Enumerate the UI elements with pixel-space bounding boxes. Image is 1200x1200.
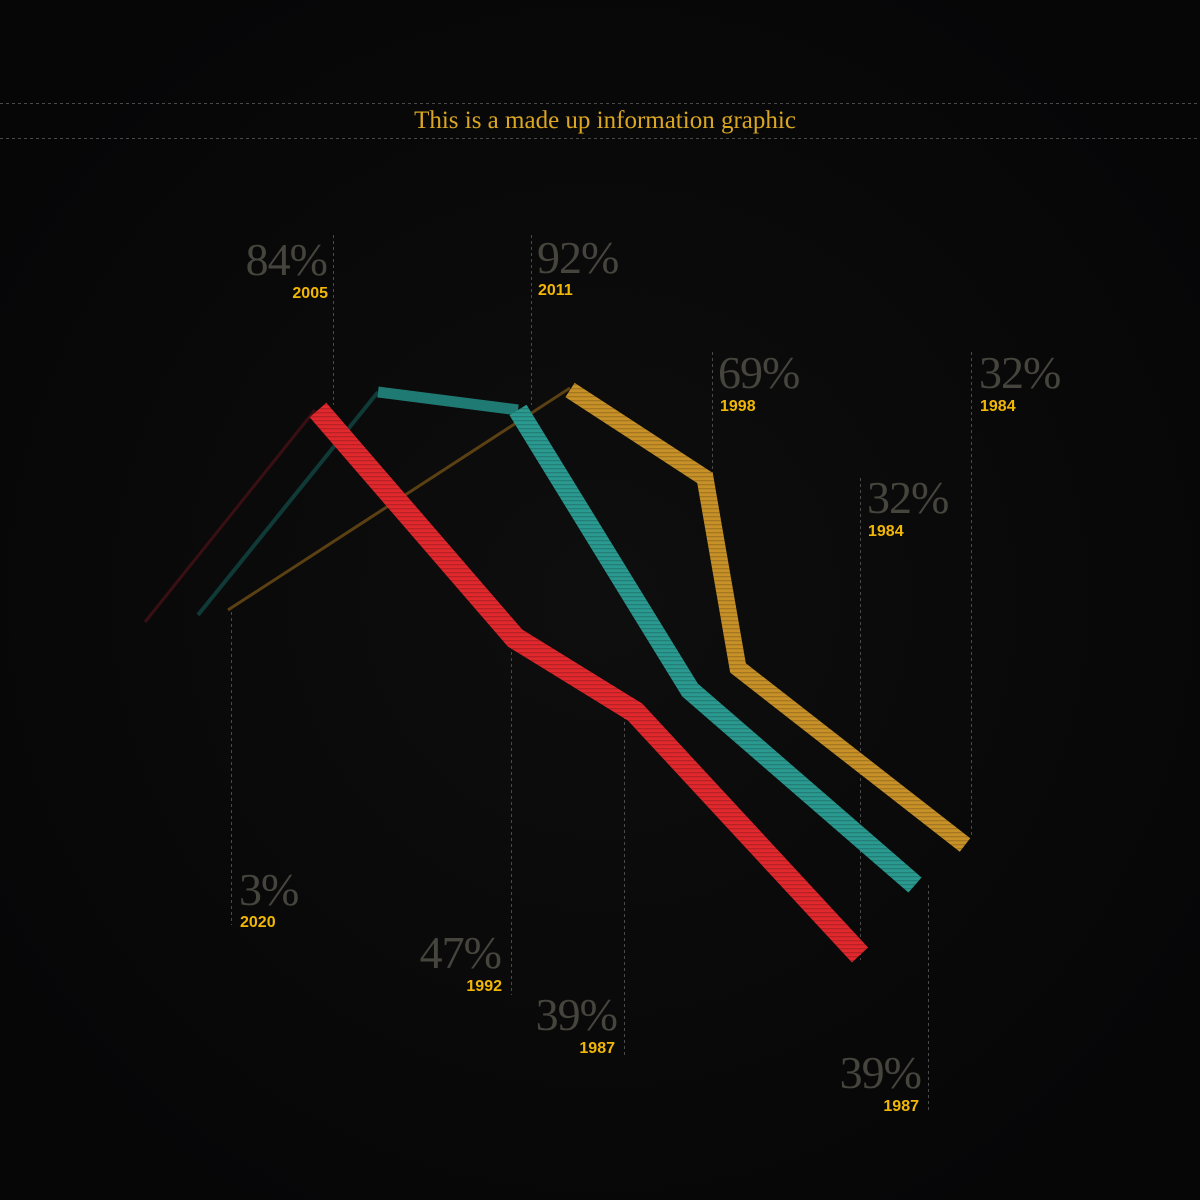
label: 3% 2020: 2020 [240, 914, 276, 931]
label: 39% 1987 low: 39% [840, 1047, 921, 1098]
label: 32% 1984: 1984 [868, 523, 904, 540]
ribbon: red [145, 410, 860, 955]
label: 39% 1987: 39% [536, 989, 617, 1040]
label: 92% 2011: 92% [537, 232, 618, 283]
ribbon: teal [198, 392, 915, 885]
label: 92% 2011: 2011 [538, 282, 573, 299]
label: 84% 2005: 2005 [292, 285, 328, 302]
label: 69% 1998: 69% [718, 347, 799, 398]
label: 84% 2005: 84% [246, 234, 327, 285]
label: 69% 1998: 1998 [720, 398, 756, 415]
label: 47% 1992: 1992 [466, 978, 502, 995]
label: 47% 1992: 47% [420, 927, 501, 978]
label: 32% 1984 right: 1984 [980, 398, 1016, 415]
guide lines [232, 235, 972, 1112]
label: 3% 2020: 3% [239, 864, 298, 915]
label: 39% 1987: 1987 [579, 1040, 615, 1057]
label: 32% 1984 right: 32% [979, 347, 1060, 398]
label: 39% 1987 low: 1987 [883, 1098, 919, 1115]
label: 32% 1984: 32% [867, 472, 948, 523]
title: This is a made up information graphic [414, 107, 796, 134]
ribbon: orange [228, 388, 965, 845]
